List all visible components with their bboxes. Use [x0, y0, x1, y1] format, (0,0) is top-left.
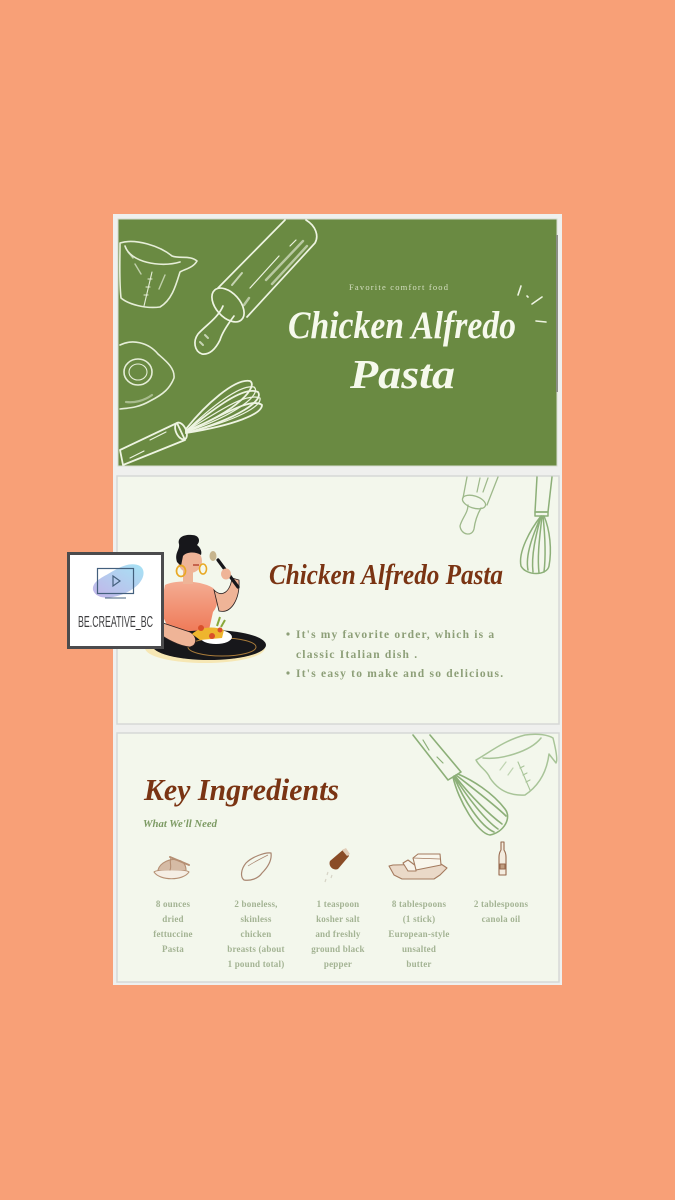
subheading: What We'll Need: [143, 818, 217, 830]
heading: Chicken Alfredo Pasta: [269, 559, 503, 591]
heading: Key Ingredients: [143, 772, 339, 807]
illustration: woman eating pasta: [145, 535, 266, 663]
title: [288, 304, 516, 397]
panel: title slide: [118, 219, 558, 466]
watermark logo: [68, 554, 162, 648]
ingredient 2 text: skinless: [240, 914, 272, 924]
icon: sparkle marks: [518, 286, 546, 322]
panel: key ingredients slide: [117, 733, 559, 982]
icon: measuring cup: [120, 241, 197, 307]
ingredient 1 text: 8 ounces: [156, 899, 190, 909]
ingredient 5 text: [474, 899, 528, 924]
ingredient descriptions: [153, 899, 528, 969]
bullet list: [286, 629, 504, 680]
title: Pasta: [349, 351, 455, 397]
icon: pasta bowl: [154, 857, 189, 879]
panel: intro slide: [117, 476, 559, 724]
ingredient 5 text: canola oil: [482, 914, 521, 924]
ingredient 4 text: unsalted: [402, 944, 436, 954]
ingredient 2 text: 1 pound total): [228, 959, 284, 969]
ingredient 4 text: (1 stick): [403, 914, 435, 924]
ingredient 4 text: [388, 899, 450, 969]
ingredient 3 text: [311, 899, 365, 969]
icon: measuring cup doodle: [476, 734, 557, 795]
icon: chicken breast: [242, 853, 271, 880]
white slide frame: [113, 214, 562, 985]
ingredient 4 text: butter: [406, 959, 432, 969]
bullet list: It's easy to make and so delicious.: [296, 668, 504, 680]
icon: monitor play: [93, 564, 144, 598]
ingredient 3 text: pepper: [324, 959, 352, 969]
ingredient 2 text: 2 boneless,: [234, 899, 278, 909]
icon: salt shaker: [325, 848, 350, 882]
logo text: BE.CREATIVE_BC: [78, 614, 153, 631]
ingredient 1 text: dried: [162, 914, 184, 924]
icon: whisk outline: [521, 477, 552, 574]
ingredient 2 text: breasts (about: [227, 944, 285, 954]
ingredient 5 text: 2 tablespoons: [474, 899, 528, 909]
icon: butter dish: [389, 854, 447, 879]
ingredient 2 text: [227, 899, 285, 969]
ingredient 2 text: chicken: [241, 929, 271, 939]
ingredient 3 text: and freshly: [315, 929, 361, 939]
ingredient 3 text: kosher salt: [316, 914, 360, 924]
bullet list: classic Italian dish .: [296, 649, 418, 661]
icon: rolling pin: [195, 220, 317, 354]
title: Chicken Alfredo: [288, 304, 516, 347]
ingredient 1 text: fettuccine: [153, 929, 193, 939]
icon: whisk: [120, 381, 262, 465]
bullet list: It's my favorite order, which is a: [296, 629, 495, 641]
icon: fried egg: [120, 342, 174, 409]
ingredient 4 text: 8 tablespoons: [392, 899, 446, 909]
ingredient 3 text: ground black: [311, 944, 365, 954]
ingredient 1 text: Pasta: [162, 944, 184, 954]
ingredient 1 text: [153, 899, 193, 954]
icon: rolling pin outline: [460, 477, 498, 534]
ingredient 4 text: European-style: [388, 929, 450, 939]
subtitle: Favorite comfort food: [349, 282, 449, 292]
ingredient 3 text: 1 teaspoon: [317, 899, 359, 909]
icon: whisk doodle: [413, 735, 508, 835]
icon: oil bottle: [499, 842, 506, 875]
